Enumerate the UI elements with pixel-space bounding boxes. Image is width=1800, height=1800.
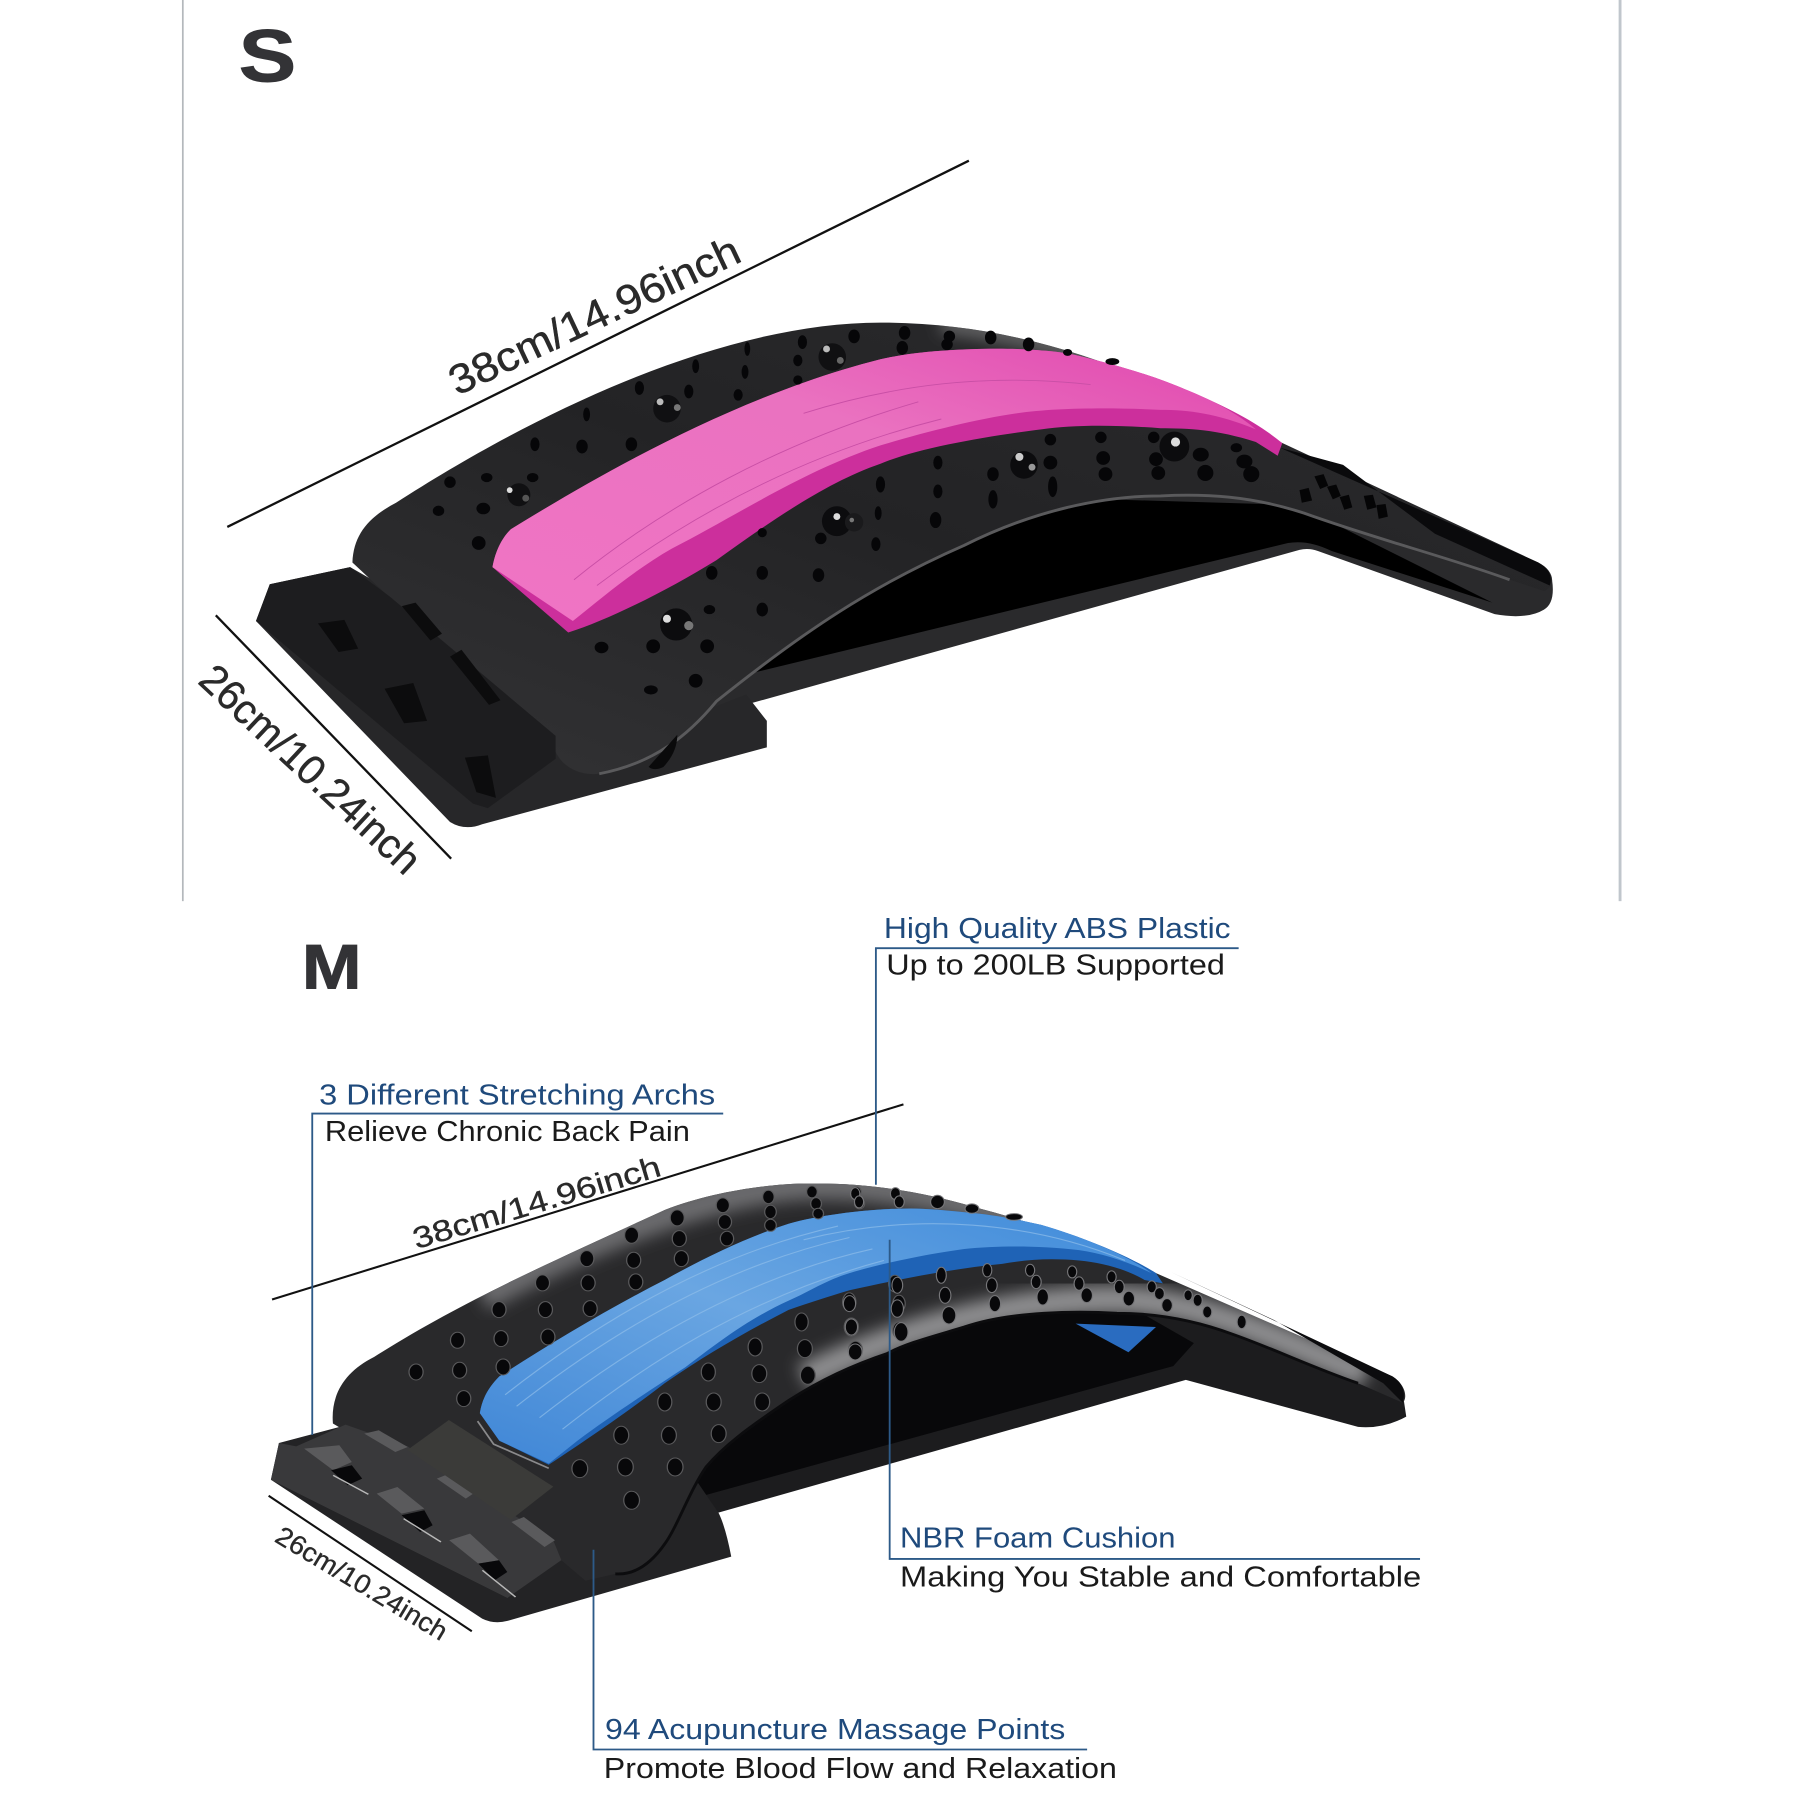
callout: stretching archs: 3 Different Stretching Archs xyxy=(319,1079,715,1111)
pad top face xyxy=(480,1208,1151,1464)
callout: massage points: 94 Acupuncture Massage Points xyxy=(605,1714,1065,1746)
callout: stretching archs: Relieve Chronic Back Pain xyxy=(325,1116,690,1148)
square vents at tip xyxy=(1299,474,1388,519)
arch inner rim xyxy=(615,1312,1358,1574)
product: blue stretcher xyxy=(271,1183,1406,1622)
arch top-edge highlight xyxy=(482,1185,1033,1297)
front foot base xyxy=(271,1427,731,1622)
front foot base xyxy=(256,567,767,827)
dark tip stripe xyxy=(1171,1272,1404,1403)
arch lower silver highlight xyxy=(804,1299,1366,1378)
foot slots xyxy=(318,603,501,798)
pad texture lines xyxy=(574,380,1091,585)
rear base xyxy=(689,1309,1406,1521)
arch inner rim xyxy=(599,495,1510,774)
pad texture lines xyxy=(505,1224,1125,1429)
dimension: width line xyxy=(216,615,451,859)
frame line right xyxy=(1619,0,1621,901)
large massage bumps xyxy=(507,343,1189,641)
callout: foam cushion: NBR Foam Cushion xyxy=(900,1522,1176,1554)
callout: massage points: Promote Blood Flow and Relaxation xyxy=(604,1753,1117,1785)
callout: foam cushion xyxy=(890,1240,1421,1593)
arch top-edge highlight xyxy=(934,325,1097,360)
massage points left xyxy=(409,1186,905,1509)
label patch xyxy=(408,1420,553,1520)
dimension: width line xyxy=(269,1496,472,1631)
massage points right xyxy=(871,326,1259,551)
heading: S: S xyxy=(239,14,296,98)
pad underside xyxy=(492,349,1282,633)
rear base xyxy=(700,494,1553,717)
dimension: length line xyxy=(272,1104,903,1299)
slotted foot plate xyxy=(256,567,556,808)
slotted foot plate xyxy=(271,1425,561,1598)
callout: massage points xyxy=(593,1550,1117,1785)
heading: M: M xyxy=(302,932,362,1002)
foot tabs and slots xyxy=(304,1430,555,1597)
pad top face xyxy=(492,349,1256,621)
underside shadow xyxy=(735,494,1492,677)
underside shadow xyxy=(695,1297,1194,1498)
product: pink stretcher xyxy=(256,323,1553,827)
panel: size M xyxy=(269,913,1421,1785)
dimension: width label: 26cm/10.24inch xyxy=(270,1520,453,1646)
dimension: length label: 38cm/14.96inch xyxy=(441,227,747,404)
dimension: length line xyxy=(227,161,969,527)
pad tray edge xyxy=(478,1421,549,1468)
massage points left xyxy=(433,329,860,695)
callout: ABS plastic: High Quality ABS Plastic xyxy=(884,913,1231,945)
arch plate xyxy=(352,323,1552,774)
dimension: length label: 38cm/14.96inch xyxy=(409,1150,665,1256)
callout: ABS plastic: Up to 200LB Supported xyxy=(886,950,1225,982)
dark tip stripe xyxy=(1280,448,1551,585)
arch plate xyxy=(333,1183,1405,1581)
frame line left xyxy=(182,0,184,901)
callout: foam cushion: Making You Stable and Comfortable xyxy=(900,1561,1421,1593)
infographic canvas xyxy=(182,0,1622,1778)
dimension: width label: 26cm/10.24inch xyxy=(191,655,430,883)
massage points right xyxy=(843,1188,1246,1360)
callout: stretching archs xyxy=(312,1079,723,1435)
blue pad wedge xyxy=(1076,1324,1156,1352)
pad underside xyxy=(480,1208,1163,1465)
callout: ABS plastic xyxy=(876,913,1239,1185)
foot hole xyxy=(649,735,677,769)
panel: size S xyxy=(191,14,1553,883)
